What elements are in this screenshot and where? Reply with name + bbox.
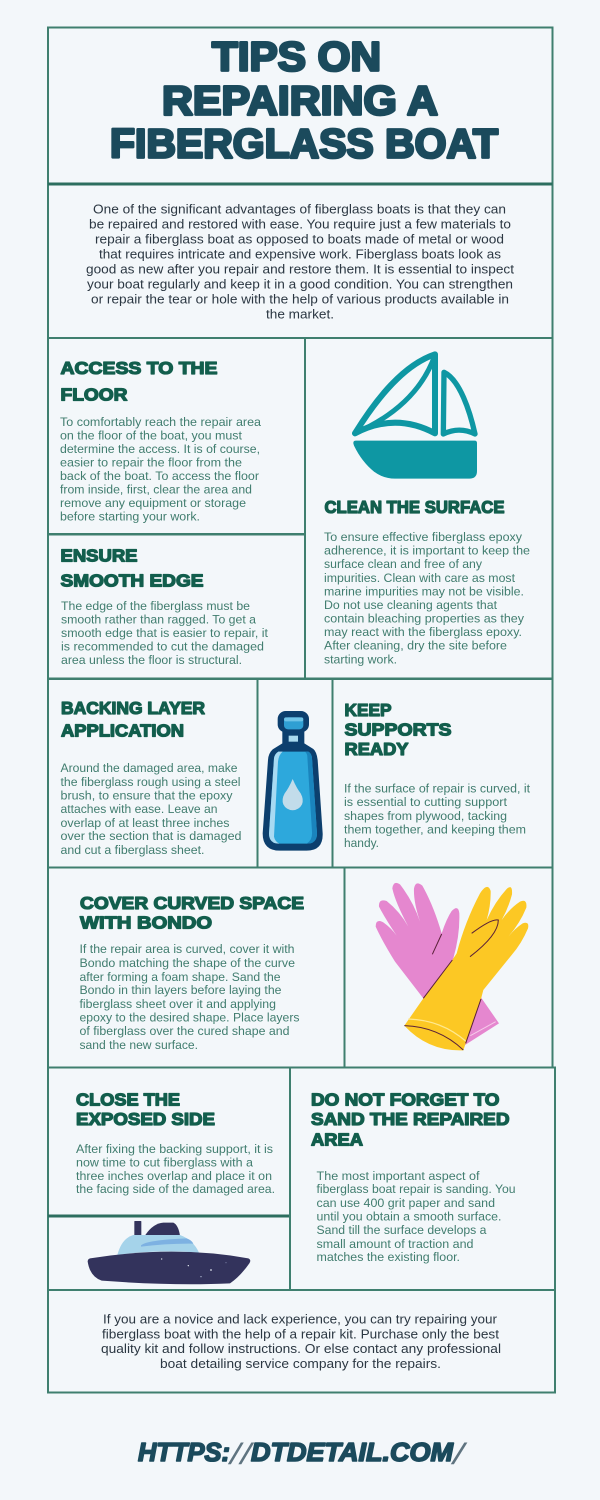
- body: access to the floor: easier to repair the floor from the: [60, 456, 242, 470]
- body: cover curved space: sand the new surface.: [80, 1038, 198, 1052]
- intro text: [86, 202, 514, 322]
- body: sand the repaired area: until you obtain a smooth surface.: [316, 1210, 502, 1224]
- body: clean the surface: After cleaning, dry the site before: [324, 638, 507, 652]
- intro text: One of the significant advantages of fiberglass boats is that they can: [93, 202, 506, 216]
- body: access to the floor: remove any equipment or storage: [60, 496, 246, 510]
- panel: bottle illustration: [258, 679, 332, 868]
- body: backing layer application: Around the damaged area, make: [60, 761, 238, 775]
- title panel: [48, 28, 552, 184]
- intro text: be repaired and restored with ease. You require just a few materials to: [89, 216, 511, 232]
- body: access to the floor: back of the boat. To access the floor: [60, 469, 259, 483]
- title: [110, 34, 498, 166]
- website url: /: [450, 1438, 468, 1471]
- website url: DTDETAIL.COM: [251, 1439, 454, 1467]
- panel: access to the floor: [48, 338, 305, 534]
- body: close the exposed side: three inches overlap and place it on: [76, 1169, 272, 1183]
- body: ensure smooth edge: is recommended to cut the damaged: [61, 640, 264, 654]
- heading: cover curved space: [80, 893, 304, 932]
- panel: introduction: [48, 184, 552, 338]
- body: close the exposed side: [76, 1142, 275, 1196]
- heading: keep supports ready: [344, 700, 452, 759]
- intro text: or repair the tear or hole with the help of various products available in: [91, 292, 509, 306]
- body: keep supports ready: is essential to cutting support: [344, 795, 508, 809]
- body: access to the floor: before starting your work.: [60, 510, 200, 524]
- panel: cover curved space with bondo: [48, 868, 344, 1068]
- body: close the exposed side: After fixing the backing support, it is: [76, 1142, 273, 1156]
- body: keep supports ready: If the surface of repair is curved, it: [344, 782, 531, 796]
- conclusion text: quality kit and follow instructions. Or else contact any professional: [101, 1341, 501, 1356]
- body: cover curved space: fiberglass sheet over it and applying: [80, 997, 276, 1011]
- body: clean the surface: surface clean and free of any: [324, 557, 483, 571]
- body: cover curved space: after forming a foam shape. Sand the: [80, 970, 281, 984]
- panel: clean the surface: [305, 338, 552, 678]
- heading: backing layer application: APPLICATION: [61, 720, 184, 740]
- heading: ensure smooth edge: SMOOTH EDGE: [60, 570, 204, 590]
- body: backing layer application: overlap of at least three inches: [60, 816, 229, 830]
- body: close the exposed side: the facing side of the damaged area.: [76, 1182, 275, 1196]
- intro text: that requires intricate and expensive work. Fiberglass boats look as: [99, 246, 502, 262]
- body: clean the surface: may react with the fiberglass epoxy.: [324, 625, 522, 639]
- heading: ensure smooth edge: [60, 546, 204, 590]
- body: sand the repaired area: Sand till the surface develops a: [316, 1223, 487, 1237]
- panel: gloves illustration: [344, 868, 552, 1068]
- heading: clean the surface: CLEAN THE SURFACE: [324, 497, 504, 517]
- heading: keep supports ready: KEEP: [344, 700, 392, 720]
- conclusion text: If you are a novice and lack experience, you can try repairing your: [103, 1312, 498, 1326]
- body: clean the surface: Do not use cleaning agents that: [324, 598, 498, 612]
- heading: ensure smooth edge: ENSURE: [60, 546, 138, 566]
- panel: backing layer application: [48, 679, 258, 868]
- body: clean the surface: contain bleaching properties as they: [324, 612, 525, 626]
- title: FIBERGLASS BOAT: [110, 120, 498, 166]
- heading: sand the repaired area: [311, 1090, 510, 1150]
- heading: cover curved space: WITH BONDO: [80, 912, 212, 932]
- body: keep supports ready: [344, 782, 531, 850]
- body: cover curved space: [80, 942, 300, 1052]
- panel: ensure smooth edge: [48, 534, 305, 678]
- body: access to the floor: To comfortably reach the repair area: [60, 415, 261, 429]
- heading: sand the repaired area: SAND THE REPAIRED: [311, 1109, 510, 1129]
- panel: motorboat illustration: [48, 1216, 290, 1290]
- body: clean the surface: impurities. Clean with care as most: [324, 571, 516, 585]
- heading: access to the floor: FLOOR: [60, 384, 128, 404]
- panel: close the exposed side: [48, 1068, 290, 1216]
- heading: backing layer application: BACKING LAYER: [61, 698, 205, 718]
- body: cover curved space: of fiberglass over the cured shape and: [80, 1024, 290, 1038]
- body: access to the floor: [60, 415, 261, 524]
- body: ensure smooth edge: The edge of the fiberglass must be: [61, 599, 250, 613]
- body: ensure smooth edge: smooth edge that is easier to repair, it: [61, 626, 269, 640]
- body: cover curved space: epoxy to the desired shape. Place layers: [80, 1010, 300, 1024]
- body: backing layer application: brush, to ensure that the epoxy: [60, 788, 233, 802]
- body: clean the surface: starting work.: [324, 652, 397, 666]
- heading: close the exposed side: [76, 1090, 215, 1129]
- intro text: good as new after you repair and restore them. It is essential to inspect: [86, 262, 514, 276]
- body: cover curved space: Bondo in thin layers before laying the: [80, 983, 282, 997]
- intro text: repair a fiberglass boat as opposed to boats made of metal or wood: [95, 232, 504, 246]
- body: access to the floor: from inside, first, clear the area and: [60, 482, 252, 496]
- heading: keep supports ready: READY: [344, 739, 409, 759]
- body: sand the repaired area: The most important aspect of: [316, 1169, 480, 1183]
- icon: rubber gloves: [376, 883, 528, 1050]
- body: ensure smooth edge: [61, 599, 269, 667]
- body: cover curved space: Bondo matching the shape of the curve: [80, 956, 295, 970]
- body: keep supports ready: shapes from plywood, tacking: [344, 809, 507, 823]
- body: keep supports ready: handy.: [344, 836, 379, 850]
- body: backing layer application: [60, 761, 242, 857]
- body: sand the repaired area: can use 400 grit paper and sand: [316, 1196, 495, 1210]
- body: backing layer application: the fiberglass rough using a steel: [60, 775, 240, 789]
- website url: //: [227, 1438, 254, 1471]
- body: access to the floor: on the floor of the boat, you must: [60, 428, 243, 442]
- heading: access to the floor: [60, 358, 218, 404]
- heading: access to the floor: ACCESS TO THE: [60, 358, 218, 378]
- heading: close the exposed side: CLOSE THE: [76, 1090, 180, 1110]
- heading: keep supports ready: SUPPORTS: [344, 720, 452, 740]
- icon: motorboat: [88, 1221, 250, 1284]
- body: backing layer application: over the section that is damaged: [60, 829, 242, 843]
- body: cover curved space: If the repair area is curved, cover it with: [80, 942, 295, 956]
- conclusion text: [101, 1312, 501, 1371]
- panel: sand the repaired area: [290, 1068, 555, 1290]
- body: sand the repaired area: small amount of traction and: [316, 1237, 474, 1251]
- heading: sand the repaired area: AREA: [311, 1130, 363, 1150]
- heading: close the exposed side: EXPOSED SIDE: [76, 1109, 215, 1129]
- body: sand the repaired area: [316, 1169, 516, 1264]
- conclusion text: fiberglass boat with the help of a repair kit. Purchase only the best: [102, 1326, 499, 1342]
- body: backing layer application: and cut a fiberglass sheet.: [60, 843, 204, 857]
- body: ensure smooth edge: smooth rather than ragged. To get a: [61, 612, 256, 626]
- intro text: your boat regularly and keep it in a good condition. You can strengthen: [87, 276, 513, 292]
- body: clean the surface: To ensure effective fiberglass epoxy: [324, 530, 523, 544]
- title: TIPS ON: [212, 34, 381, 80]
- icon: resin bottle: [263, 711, 323, 851]
- body: access to the floor: determine the access. It is of course,: [60, 442, 260, 456]
- website url: [138, 1438, 468, 1471]
- body: sand the repaired area: fiberglass boat repair is sanding. You: [316, 1182, 516, 1196]
- conclusion text: boat detailing service company for the repairs.: [160, 1356, 441, 1371]
- intro text: the market.: [266, 306, 334, 322]
- body: clean the surface: [324, 530, 530, 666]
- heading: backing layer application: [61, 698, 205, 740]
- heading: sand the repaired area: DO NOT FORGET TO: [311, 1090, 500, 1110]
- website url: HTTPS:: [138, 1439, 230, 1467]
- body: close the exposed side: now time to cut fiberglass with a: [76, 1156, 253, 1170]
- title: REPAIRING A: [162, 78, 438, 124]
- heading: cover curved space: COVER CURVED SPACE: [80, 893, 304, 913]
- body: clean the surface: adherence, it is important to keep the: [324, 544, 530, 558]
- panel: conclusion: [48, 1290, 555, 1392]
- body: keep supports ready: them together, and keeping them: [344, 822, 526, 836]
- panel: keep supports ready: [332, 679, 552, 868]
- body: backing layer application: attaches with ease. Leave an: [60, 802, 218, 816]
- body: sand the repaired area: matches the existing floor.: [316, 1250, 460, 1264]
- body: clean the surface: marine impurities may not be visible.: [324, 584, 524, 598]
- body: ensure smooth edge: area unless the floor is structural.: [61, 653, 242, 667]
- icon: sailboat: [353, 354, 477, 479]
